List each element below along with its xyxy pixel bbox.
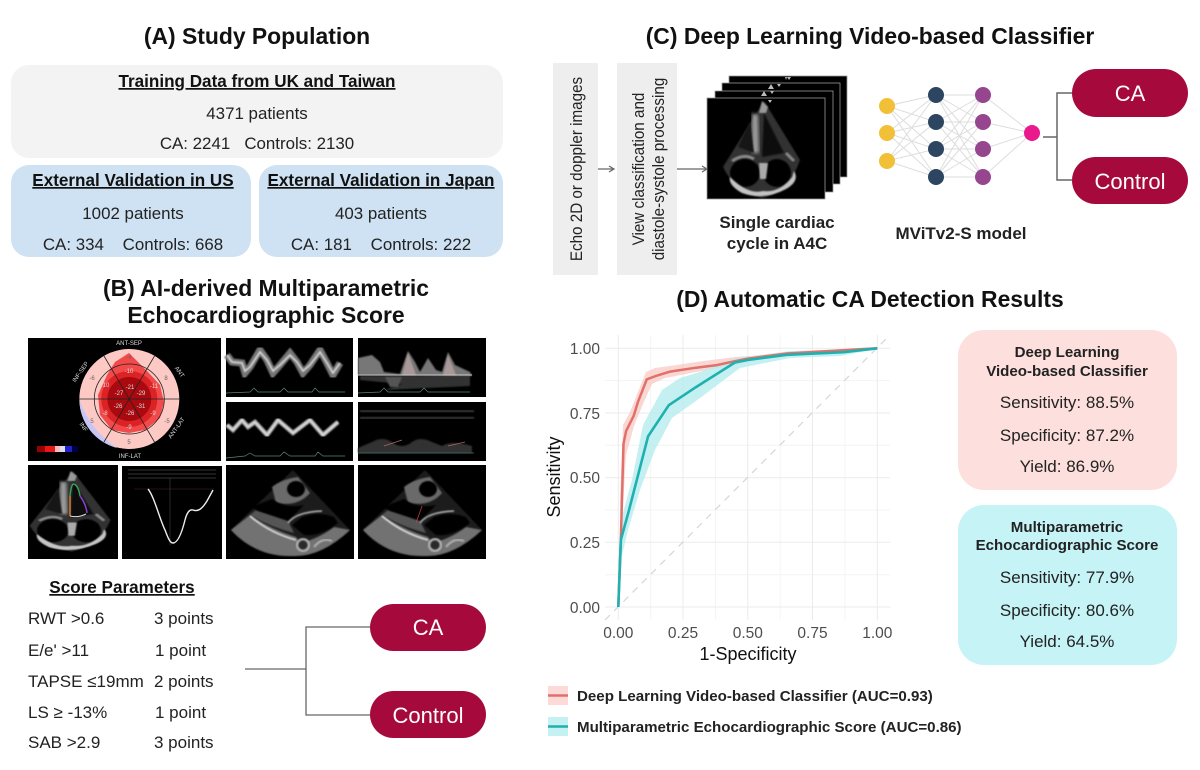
y axis ticks: 0.50 (570, 470, 600, 487)
outcome pill: CA: CA (1115, 81, 1146, 106)
results card: score: Multiparametric (1011, 519, 1123, 536)
results card: score: Sensitivity: 77.9% (1000, 568, 1134, 587)
bullseye strain map: -9 (150, 411, 156, 417)
legend: Multiparametric Echocardiographic Score (AUC=0.86) (577, 719, 962, 736)
bullseye strain map: ANT-SEP (116, 341, 142, 347)
card: external validation Japan (259, 165, 503, 257)
bullseye strain map: -5 (164, 419, 170, 425)
bullseye strain map: -4 (126, 355, 132, 361)
outcome pill: CA (370, 604, 486, 651)
bullseye strain map: ANT (173, 366, 185, 379)
score parameters list: 1 point (155, 641, 206, 660)
y axis ticks: 0.25 (570, 535, 600, 552)
x axis ticks: 0.25 (668, 625, 698, 642)
card: training data: Training Data from UK and Taiwan (118, 72, 396, 91)
heading: panel C: (C) Deep Learning Video-based Classifier (646, 23, 1094, 49)
score parameters list: TAPSE ≤19mm (28, 672, 144, 691)
heading: panel B: (B) AI-derived Multiparametric (103, 275, 429, 301)
bullseye strain map: -26 (126, 411, 135, 417)
heading: study population: (A) Study Population (144, 23, 370, 49)
axis title x: 1-Specificity (699, 644, 797, 664)
parasternal long axis echo with caliper (358, 465, 486, 559)
results card: score: Specificity: 80.6% (1000, 601, 1134, 620)
card: training data: CA: 2241 Controls: 2130 (160, 134, 354, 153)
heading: panel D: (D) Automatic CA Detection Results (676, 286, 1064, 312)
card: training data: 4371 patients (206, 104, 308, 123)
score parameters list: 2 points (154, 672, 214, 691)
score parameters list: Score Parameters (49, 578, 195, 597)
score parameters list: 1 point (155, 703, 206, 722)
bullseye strain map: 5 (127, 440, 131, 446)
score parameters list: SAB >2.9 (28, 733, 100, 752)
box: view classification: View classification and (629, 93, 648, 245)
bullseye strain map: -6 (89, 376, 95, 382)
score parameters list: 3 points (154, 609, 214, 628)
results card: deep learning (958, 330, 1177, 490)
card: external validation Japan: External Validation in Japan (267, 171, 495, 190)
outcome pill: CA: CA (413, 615, 444, 640)
y axis ticks: 0.00 (570, 600, 600, 617)
doppler panel 3 (226, 402, 353, 461)
doppler panel 2 (358, 338, 486, 397)
results card: score: Yield: 64.5% (1020, 632, 1114, 651)
x axis ticks: 1.00 (862, 625, 893, 642)
results card: deep learning: Deep Learning (1015, 344, 1119, 361)
parasternal long axis echo (226, 465, 354, 559)
curve: deep learning (618, 348, 877, 607)
bullseye strain map: -26 (114, 404, 123, 410)
x axis ticks: 0.50 (733, 625, 763, 642)
curve: score (618, 348, 877, 607)
stacked echo frames (707, 76, 847, 199)
bullseye strain map: 8 (164, 376, 168, 382)
card: external validation Japan: CA: 181 Controls: 222 (291, 235, 471, 254)
results card: deep learning: Video-based Classifier (986, 363, 1148, 380)
score parameters list: LS ≥ -13% (28, 703, 107, 722)
card: external validation Japan: 403 patients (335, 204, 427, 223)
box: view classification (617, 63, 677, 275)
legend: Deep Learning Video-based Classifier (AUC=0.93) (577, 688, 933, 705)
results card: deep learning: Sensitivity: 88.5% (1000, 393, 1134, 412)
arrow (677, 166, 707, 172)
connector: classifier to outcomes (1043, 93, 1072, 180)
x axis ticks: 0.75 (797, 625, 828, 642)
card: external validation US: CA: 334 Controls: 668 (43, 235, 223, 254)
bullseye strain map: INF (78, 422, 88, 433)
bullseye strain map: -11 (150, 384, 159, 390)
bullseye strain map: -31 (137, 404, 146, 410)
bullseye strain map: -29 (137, 391, 146, 397)
box: view classification: diastole-systole processing (649, 78, 668, 260)
x axis ticks (603, 625, 893, 642)
heading: panel B: Echocardiographic Score (127, 302, 405, 328)
card: training data (11, 65, 503, 158)
strain curve chart (122, 466, 222, 559)
doppler panel 1 (226, 338, 353, 397)
connector: score to outcomes (245, 627, 370, 715)
outcome pill: Control: Control (393, 703, 463, 728)
y axis ticks (570, 341, 600, 617)
confidence band: score (618, 348, 877, 607)
results card: deep learning: Yield: 86.9% (1020, 457, 1114, 476)
caption: single cardiac cycle: Single cardiac (719, 213, 835, 232)
confidence band: deep learning (620, 356, 750, 540)
x axis ticks: 0.00 (603, 625, 634, 642)
caption: model: MViTv2-S model (896, 224, 1026, 243)
results card: score: Echocardiographic Score (976, 537, 1158, 554)
caption: single cardiac cycle: cycle in A4C (727, 234, 827, 253)
bullseye strain map: INF-SEP (72, 361, 90, 384)
neural network diagram (879, 87, 1040, 185)
bullseye strain map: -27 (115, 391, 124, 397)
score parameters list: E/e' >11 (28, 641, 89, 660)
bullseye strain map (28, 338, 221, 461)
bullseye strain map: -10 (125, 369, 134, 375)
bullseye strain map: -10 (101, 383, 110, 389)
card: external validation US: 1002 patients (82, 204, 184, 223)
y axis ticks: 0.75 (570, 406, 600, 423)
box: echo images (553, 63, 598, 275)
y axis ticks: 1.00 (570, 341, 600, 358)
outcome pill: CA (1072, 69, 1188, 117)
diagonal reference line (605, 335, 890, 620)
score parameters list (28, 578, 214, 752)
bullseye strain map: -21 (126, 385, 135, 391)
card: external validation US (11, 165, 251, 257)
m-mode panel (358, 402, 486, 461)
box: echo images: Echo 2D or doppler images (567, 77, 586, 261)
card: external validation US: External Validation in US (32, 171, 234, 190)
score parameters list: RWT >0.6 (28, 609, 104, 628)
arrow (598, 166, 614, 172)
outcome pill: Control: Control (1095, 169, 1165, 194)
panel A: study population (11, 23, 503, 257)
outcome pill: Control (1072, 157, 1188, 204)
axis title y: Sensitivity (544, 436, 564, 518)
bullseye strain map: ANT-LAT (168, 417, 187, 440)
bullseye strain map: 5 (90, 419, 94, 425)
bullseye strain map: -9 (126, 425, 132, 431)
outcome pill: Control (370, 691, 486, 738)
apical echo with speckle tracking (28, 465, 118, 559)
score parameters list: 3 points (154, 733, 214, 752)
legend (548, 686, 962, 736)
bullseye strain map: INF-LAT (119, 454, 141, 460)
ROC chart (544, 335, 893, 664)
bullseye strain map: -8 (102, 411, 108, 417)
results card: score (958, 505, 1177, 665)
results card: deep learning: Specificity: 87.2% (1000, 426, 1134, 445)
